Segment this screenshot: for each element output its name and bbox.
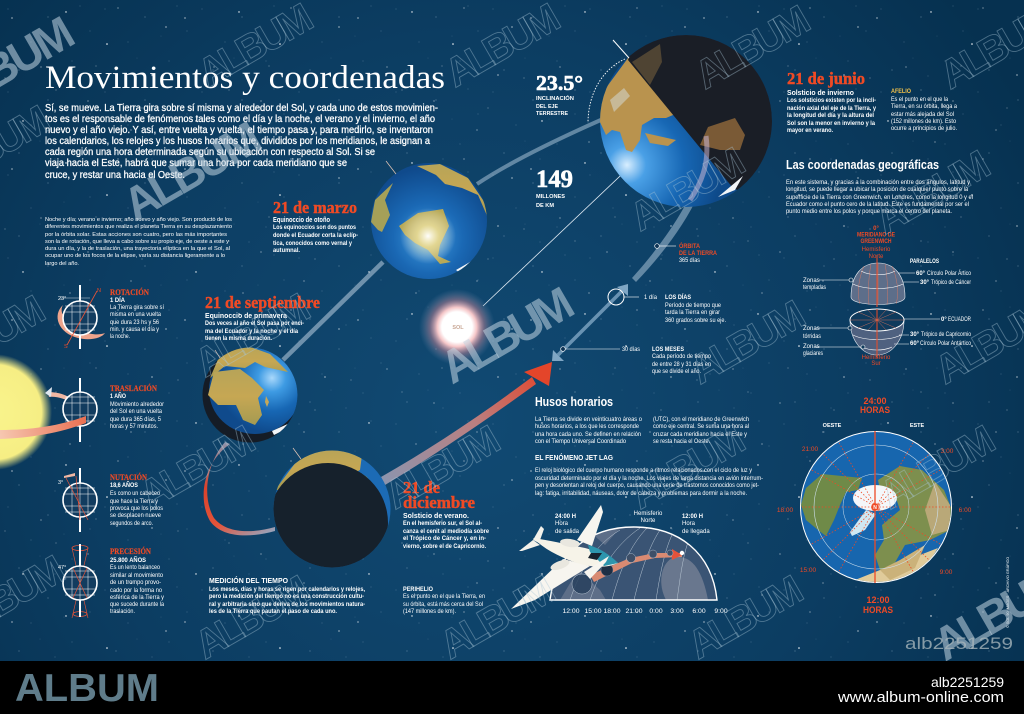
flight labels: Hora (682, 521, 696, 527)
callout: 21 de septiembre (205, 293, 320, 342)
text: afelio (891, 89, 958, 132)
footer bar: www.album-online.com (837, 689, 1004, 706)
callout: los días: 360 grados sobre su eje. (665, 318, 726, 324)
panel: nutación: Es como un cabeceo (110, 491, 161, 497)
callout: los meses (561, 347, 712, 375)
globe hour labels: HORAS (860, 405, 890, 415)
callout: 21 de junio (787, 69, 877, 134)
icon: airplane (511, 505, 618, 609)
text: medición del tiempo: les de la Tierra que pautan el paso de cada uno. (209, 609, 337, 615)
callout: 21 de septiembre: 21 de septiembre (205, 293, 320, 312)
callout: órbita de la Tierra (655, 242, 718, 264)
callout: 21 de marzo: Los equinoccios son dos puntos (273, 225, 357, 231)
watermark id: alb2251259 (905, 634, 1013, 653)
text: husos horarios: cruzar cada meridiano hacia el Este y (653, 432, 747, 438)
callout: 21 de septiembre: ma del Ecuador y la noche y el día (205, 329, 299, 335)
globe hour labels: ESTE (910, 423, 925, 429)
watermark: outlined: ALBUM (872, 417, 1003, 518)
chart: hemispheres diagram: 60° (916, 271, 926, 277)
orbit: red band September to December (204, 442, 275, 535)
orbit: light band March to June (477, 119, 603, 184)
callout: 21 de diciembre: 21 de (403, 478, 440, 497)
sun SOL: SOL (452, 325, 464, 331)
flight labels: Hemisferio (634, 511, 663, 517)
text: perihelio: su órbita, está más cerca del Sol (403, 602, 483, 608)
panel: precesión: que sucede durante la (110, 602, 165, 608)
chart: hemispheres diagram: 30° (920, 280, 930, 286)
panel: rotación: 1 DÍA (110, 296, 126, 304)
globe hour labels: 6:00 (959, 507, 972, 514)
sun line (483, 119, 678, 306)
intro text: tos es el responsable de fenómenos tales como el día y la noche, el verano y el invierno, el año (45, 113, 435, 125)
panel: rotación: misma en una vuelta (110, 312, 162, 318)
text: afelio: Es el punto en el que la (891, 97, 949, 103)
callout: los días: 1 día (644, 295, 658, 301)
orbit: double arrow days and months (552, 284, 628, 361)
callout: 21 de marzo (273, 198, 358, 254)
watermark: outlined: ALBUM (680, 567, 811, 668)
panel: nutación: segundos de arco. (110, 521, 153, 527)
secondary intro text: por la órbita solar. Estas acciones son cuatro, pero las más importantes (45, 232, 227, 238)
panel: precesión: de un trompo provo- (110, 580, 161, 586)
callout: 21 de junio: 21 de junio (787, 69, 865, 88)
chart: polar time zone globe: N (873, 505, 877, 511)
text: husos horarios: La Tierra se divide en veinticuatro áreas o (535, 417, 643, 423)
callout: 21 de septiembre: Equinoccio de primavera (205, 311, 288, 320)
panel: rotación: min. y causa el día y (110, 327, 159, 333)
text: coordenadas: longitud, se puede llegar a ubicar la posición de cualquier punto sobre la (786, 187, 969, 193)
text: el fenómeno jet lag: El reloj biológico del cuerpo humano responde a ritmos relacionados con el ciclo de luz y (535, 468, 752, 474)
icon: rotation globe: S (64, 344, 68, 350)
stat: 149 millones (536, 166, 573, 209)
footer bar: alb2251259 (931, 674, 1004, 690)
icon: translation globe (0, 378, 97, 442)
text: afelio: estar más alejada del Sol (891, 112, 954, 118)
text: husos horarios: se resta hacia el Oeste. (653, 439, 710, 445)
time axis (562, 608, 728, 615)
intro text: cada región una hora determinada según su ubicación con respecto al Sol. Si se (45, 146, 375, 158)
stat: 23.5 degrees: DEL EJE (536, 104, 558, 110)
panel: nutación: que hace la Tierra y (110, 499, 158, 505)
callout: 21 de marzo: 21 de marzo (273, 198, 357, 217)
panel: precesión: esférica de la Tierra y (110, 595, 164, 601)
callout: 21 de junio: Sol son la menor en invierno y la (787, 121, 876, 127)
panel: traslación: que dura 365 días, 5 (110, 417, 162, 423)
credit: © SOL 90 IMAGES · ARCHIVO GRÁFICO (1006, 557, 1010, 628)
callout: los días (608, 289, 726, 324)
watermark: outlined: ALBUM (132, 417, 263, 518)
flight labels (555, 511, 710, 535)
callout: los días: LOS DÍAS (665, 293, 691, 301)
text: medición del tiempo: MEDICIÓN DEL TIEMPO (209, 576, 288, 585)
watermark: outlined: ALBUM (188, 285, 318, 386)
text: afelio: AFELIO (891, 89, 911, 95)
text: el fenómeno jet lag: EL FENÓMENO JET LAG (535, 453, 613, 462)
text: husos horarios: con el Tiempo Universal Coordinado (535, 439, 627, 445)
text: el fenómeno jet lag: lag: fatiga, irritabilidad, náuseas, dolor de cabeza y problemas para dormir a la noche. (535, 491, 747, 497)
panel: rotación: La Tierra gira sobre sí (110, 305, 164, 311)
callout: órbita de la Tierra: DE LA TIERRA (679, 251, 718, 257)
footer bar: ALBUM (15, 667, 159, 710)
callout: órbita de la Tierra: 365 días (679, 258, 700, 264)
chart: hemispheres diagram: Zonas (803, 344, 820, 350)
text: afelio: Tierra, en su órbita, llega a (891, 104, 958, 110)
watermark: outlined: ALBUM (188, 567, 318, 668)
panel: precesión: 25.800 AÑOS (110, 557, 146, 564)
callout: los meses: que se divide el año. (652, 369, 701, 375)
chart: hemispheres diagram: tórridas (803, 334, 821, 340)
meridian label: GREENWICH (860, 239, 892, 245)
stat: 23.5 degrees: TERRESTRE (536, 111, 568, 117)
time axis: 18:00 (603, 608, 621, 615)
text: husos horarios (535, 417, 749, 445)
stat: 23.5 degrees: 23.5° (536, 71, 583, 95)
flight labels: 24:00 H (555, 514, 576, 520)
stat: 149 millones: MILLONES (536, 194, 565, 200)
globe hour labels: 15:00 (800, 567, 817, 574)
text: el fenómeno jet lag (535, 453, 763, 497)
text: perihelio: PERIHELIO (403, 587, 433, 593)
secondary intro text: diferentes movimientos que realiza el planeta Tierra en su desplazamiento (45, 224, 232, 230)
globe hour labels: 12:00 (866, 595, 890, 605)
text: coordenadas: Ecuador como el punto cero de la latitud. Este es fundamental por ser el (786, 202, 969, 208)
heading: husos horarios: Husos horarios (535, 394, 613, 409)
axis angle marker (588, 40, 629, 123)
text: medición del tiempo: pero la medición del tiempo no es una construcción cultu- (209, 594, 364, 600)
earth: 21 de junio (600, 35, 772, 207)
stat: 149 millones: DE KM (536, 203, 554, 209)
earth: 21 de diciembre (274, 448, 390, 568)
text: husos horarios: como eje central. Se suma una hora al (653, 424, 749, 430)
flight labels: Hora (555, 521, 569, 527)
watermark: outlined: ALBUM (682, 292, 813, 393)
secondary intro text: Noche y día; verano e invierno; año nuevo y año viejo. Son producto de los (45, 217, 232, 223)
chart: hemispheres diagram: 30° (910, 332, 920, 338)
watermark: outlined: ALBUM (688, 0, 818, 98)
meridian label: Norte (869, 254, 884, 260)
orbit: light band arrow from June Earth (632, 137, 712, 282)
callout: órbita de la Tierra: ÓRBITA (679, 242, 701, 250)
text: coordenadas: superficie de la Tierra con Greenwich, en Londres, como la longitud 0 y el (786, 195, 973, 201)
text: husos horarios: (UTC), con el meridiano de Greenwich (653, 417, 749, 423)
icon: nutation globe: 3° (58, 480, 63, 486)
text: el fenómeno jet lag: pen y desorientan al reloj del cuerpo, causando una serie de trastornos conocidos como jet- (535, 483, 759, 489)
stat: 23.5 degrees (536, 71, 583, 117)
callout: 21 de diciembre: canza el cenit al mediodía sobre (403, 529, 490, 535)
flight labels: 12:00 H (682, 514, 703, 520)
footer bar (0, 661, 1024, 714)
callout: 21 de junio: nación axial del eje de la Tierra, y (787, 106, 877, 112)
panel: nutación: provoca que los polos (110, 506, 163, 512)
time axis: 12:00 (562, 608, 580, 615)
text: afelio: ocurre a principios de julio. (891, 126, 957, 132)
callout: 21 de diciembre: vierno, sobre el de Capricornio. (403, 544, 486, 550)
callout: los meses: Cada período de tiempo (652, 354, 712, 360)
heading: las coordenadas geográficas: Las coordenadas geográficas (786, 157, 939, 172)
upper hemisphere (851, 255, 905, 307)
panel: precesión: cado por la forma no (110, 588, 163, 594)
secondary intro text: son la de rotación, que lleva a cabo sobre su propio eje, de oeste a este y (45, 239, 229, 245)
flight labels: de llegada (682, 529, 710, 535)
chart: hemispheres diagram: Trópico de Cáncer (931, 280, 971, 286)
text: medición del tiempo: ral y arbitraria sino que deriva de los movimientos natura- (209, 602, 365, 608)
intro text: nuevo y el año viejo. Y así, entre vuelta y vuelta, el tiempo pasa y, para medirlo, se inventaron (45, 124, 433, 136)
panel: nutación: NUTACIÓN (110, 472, 148, 482)
text: afelio: (152 millones de km). Esto (891, 119, 957, 125)
text: perihelio: (147 millones de km). (403, 609, 456, 615)
text: perihelio: Es el punto en el que la Tierra, en (403, 594, 485, 600)
callout: 21 de marzo: donde el Ecuador corta la eclíp- (273, 233, 358, 239)
lower hemisphere (850, 309, 904, 358)
panel: nutación: 18,6 AÑOS (110, 482, 138, 489)
callout: 21 de marzo: tica, conocidos como vernal y (273, 241, 353, 247)
text: el fenómeno jet lag: oscuridad determinado por el día y la noche. Los viajes de larga distancia en avión interrum- (535, 476, 763, 482)
callout: 21 de septiembre: tienen la misma duración. (205, 336, 272, 342)
callout: 21 de marzo: autumnal. (273, 248, 300, 254)
watermark: outlined: ALBUM (432, 567, 563, 668)
flight labels: de salida (555, 529, 580, 535)
callout: 21 de junio: la longitud del día y la altura del (787, 113, 874, 119)
callout: 21 de marzo: Equinoccio de otoño (273, 215, 330, 224)
chart: hemispheres diagram: Zonas (803, 278, 820, 284)
callout: 21 de junio: mayor en verano. (787, 128, 833, 134)
sun SOL (419, 289, 495, 365)
icon: rotation globe: 23° (58, 296, 66, 302)
globe hour labels: 18:00 (777, 507, 794, 514)
watermark: filled: ALBUM (114, 111, 270, 231)
panel: nutación: se desplacen nueve (110, 513, 162, 519)
icon: precession globe: 47° (58, 565, 66, 571)
meridian label: Hemisferio (862, 247, 891, 253)
intro text: los calendarios, los relojes y los husos horarios que, divididos por los meridianos, le asignan a (45, 135, 430, 147)
panel: precesión (58, 544, 165, 618)
secondary intro text: ocupar uno de los focos de la elipse, varía su distancia ligeramente a lo (45, 253, 225, 259)
callout: 21 de septiembre: Dos veces al año el Sol pasa por enci- (205, 321, 304, 327)
earth: 21 de marzo (371, 161, 488, 279)
text: coordenadas: En este sistema, y gracias a la combinación entre dos ángulos, latitud y (786, 180, 970, 186)
callout: 21 de diciembre: Solsticio de verano. (403, 511, 469, 520)
chart: hemispheres diagram: ECUADOR (948, 317, 972, 323)
callout: 21 de junio: Los solsticios existen por la incli- (787, 98, 876, 104)
icon: rotation globe (58, 285, 105, 350)
globe hour labels: HORAS (863, 605, 893, 615)
text: coordenadas (786, 180, 973, 215)
icon: sun at left (0, 354, 52, 470)
panel: rotación: ROTACIÓN (110, 287, 150, 297)
panel: rotación: la noche. (110, 334, 130, 340)
intro text (45, 102, 438, 181)
intro text: Sí, se mueve. La Tierra gira sobre sí misma y alrededor del Sol, y cada uno de estos movimien- (45, 102, 438, 114)
meridian label (857, 226, 895, 260)
panel: traslación: TRASLACIÓN (110, 383, 158, 393)
time axis: 0:00 (649, 608, 663, 615)
text: perihelio (403, 587, 485, 615)
chart: hemispheres diagram: Zonas (803, 326, 820, 332)
secondary intro text (45, 217, 232, 267)
parallels labels (816, 273, 940, 347)
panel: rotación (58, 285, 164, 350)
chart: hemispheres diagram: glaciares (803, 351, 823, 357)
panel: precesión: traslación. (110, 609, 135, 615)
watermark: filled: ALBUM (431, 276, 583, 394)
orbit: light band September to March (283, 262, 383, 360)
orbit: red arrow December to months (381, 362, 552, 485)
panel: traslación: Movimiento alrededor (110, 402, 164, 408)
chart: polar time zone globe (800, 431, 952, 592)
meridian label: 0° (873, 226, 879, 232)
stat: 149 millones: 149 (536, 166, 573, 193)
callout: 21 de diciembre: diciembre (403, 493, 475, 512)
title: Movimientos y coordenadas (45, 60, 445, 96)
globe hour labels: 3:00 (941, 448, 954, 455)
watermark: outlined: ALBUM (868, 142, 998, 243)
globe hour labels: OESTE (823, 423, 842, 429)
intro text: viaja hacia el Este, habrá que sumar una hora por cada meridiano que se (45, 157, 347, 169)
time axis: 6:00 (692, 608, 706, 615)
meridian label: MERIDIANO DE (857, 232, 895, 238)
panel: precesión: PRECESIÓN (110, 546, 152, 556)
panel: nutación (58, 468, 163, 532)
panel: traslación: horas y 57 minutos. (110, 424, 158, 430)
callout: los días: tarda la Tierra en girar (665, 310, 720, 316)
icon: rotation globe: N (97, 288, 101, 294)
panel: rotación: que dura 23 hs y 56 (110, 320, 160, 326)
panel: traslación (0, 378, 164, 442)
callout: 21 de diciembre: En el hemisferio sur, el Sol al- (403, 521, 482, 527)
watermark: outlined: ALBUM (622, 417, 753, 518)
chart: hemispheres diagram (803, 226, 972, 367)
chart: hemispheres diagram: Círculo Polar Ártico (927, 270, 972, 277)
intro text: cruce, y restar una hacia el Oeste. (45, 169, 185, 181)
secondary intro text: largo del año. (45, 261, 79, 267)
callout: los meses: 30 días (622, 347, 640, 353)
text: husos horarios: una hora cada uno. Se definen en relación (535, 432, 641, 438)
callout: 21 de diciembre (403, 478, 490, 550)
chart: hemispheres diagram: templadas (803, 285, 826, 291)
text: husos horarios: husos horarios, a los que les corresponde (535, 424, 640, 430)
callout: los meses: de entre 28 y 31 días en (652, 362, 711, 368)
callout: los meses: LOS MESES (652, 347, 684, 353)
panel: precesión: Es un lento balanceo (110, 565, 161, 571)
panel: traslación: del Sol en una vuelta (110, 409, 163, 415)
watermark: outlined: ALBUM (378, 417, 508, 518)
callout: los días: Período de tiempo que (665, 303, 722, 309)
text: coordenadas: punto medio entre los polos y porque marca el centro del planeta. (786, 209, 952, 215)
chart: hemispheres diagram: 60° (910, 341, 920, 347)
callout: 21 de diciembre: el Trópico de Cáncer y, en in- (403, 536, 486, 542)
time axis: 9:00 (714, 608, 728, 615)
flight labels: Norte (641, 518, 656, 524)
chart: hemispheres diagram: Círculo Polar Antártico (920, 341, 972, 347)
panel: traslación: 1 AÑO (110, 393, 126, 400)
chart: jet lag flight map (550, 527, 717, 600)
text: medición del tiempo (209, 576, 365, 615)
chart: hemispheres diagram: Sur (871, 361, 881, 367)
chart: hemispheres diagram: Hemisferio (862, 355, 891, 361)
chart: hemispheres diagram: Trópico de Capricornio (921, 332, 972, 338)
globe hour labels: 21:00 (802, 446, 819, 453)
time axis: 15:00 (584, 608, 602, 615)
globe hour labels (777, 396, 972, 615)
time axis: 3:00 (670, 608, 684, 615)
time axis: 21:00 (625, 608, 643, 615)
panel: precesión: similar al movimiento (110, 573, 164, 579)
globe hour labels: 9:00 (940, 569, 953, 576)
globe hour labels: 24:00 (863, 396, 887, 406)
watermark: outlined: ALBUM (622, 139, 753, 240)
secondary intro text: dura un día, y la de traslación, una trayectoria elíptica en la que el Sol, al (45, 246, 230, 252)
chart: hemispheres diagram: 0° (941, 317, 947, 323)
stat: 23.5 degrees: INCLINACIÓN (536, 94, 574, 102)
callout: 21 de junio: Solsticio de invierno (787, 88, 854, 97)
earth: 21 de septiembre (202, 345, 301, 442)
text: medición del tiempo: Los meses, días y horas se rigen por calendarios y relojes, (209, 587, 365, 593)
chart: hemispheres diagram: PARALELOS (910, 259, 939, 265)
